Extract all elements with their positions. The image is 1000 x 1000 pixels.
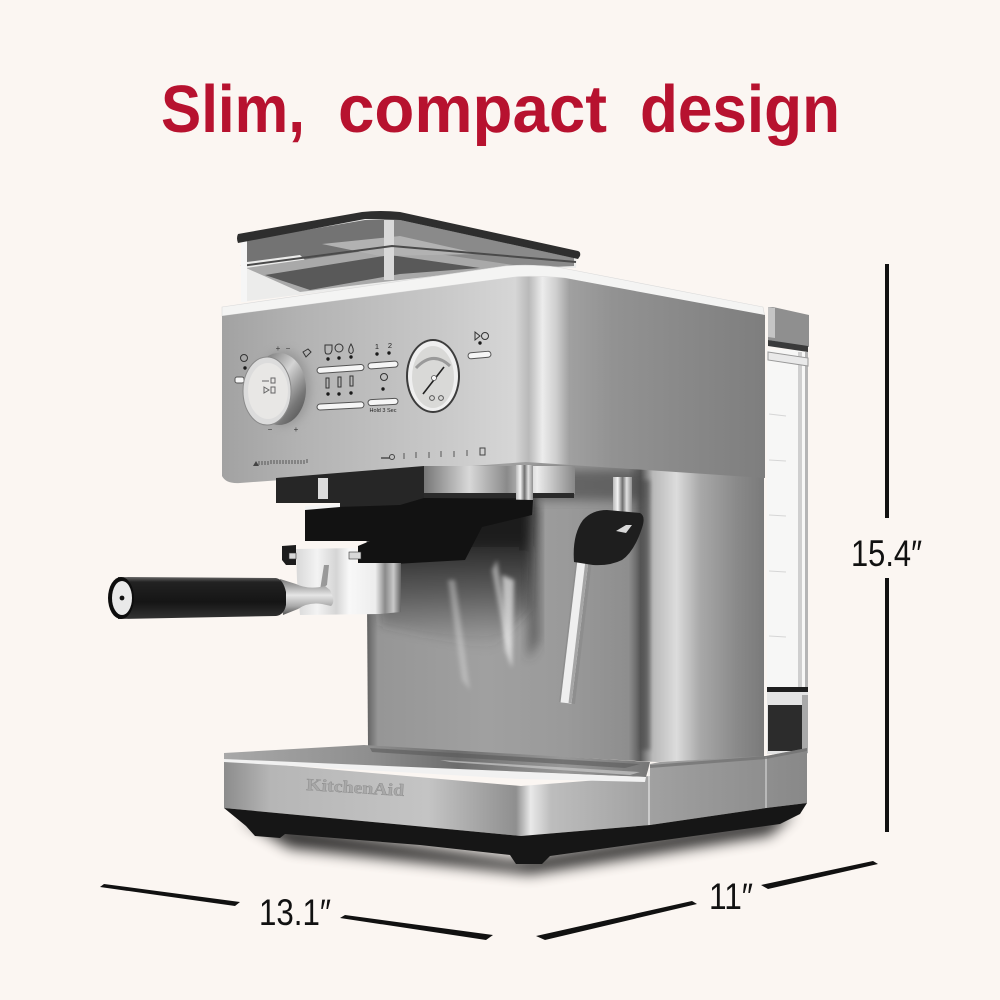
title: compact	[338, 72, 607, 147]
steam wand grip	[574, 510, 644, 565]
shadow beneath the group head	[366, 498, 542, 640]
espresso machine	[108, 211, 809, 874]
bottom indicators	[259, 450, 467, 465]
control panel: +	[294, 425, 299, 434]
plus minus labels: +	[276, 344, 281, 353]
portafilter handle	[108, 577, 333, 619]
height dimension: 15.4″	[851, 533, 922, 574]
control dial	[243, 351, 310, 425]
drip tray base	[224, 745, 807, 836]
button bars	[235, 351, 491, 410]
portafilter basket	[289, 548, 401, 615]
base feet	[224, 803, 807, 864]
depth dimension: 11″	[709, 876, 753, 917]
control panel: Hold 3 Sec	[370, 408, 397, 414]
height dimension	[851, 264, 922, 832]
control panel: −	[268, 425, 273, 434]
panel icons	[240, 332, 488, 388]
brand logo: KitchenAid	[306, 775, 405, 800]
floor shadow	[240, 812, 795, 874]
number labels: 1	[375, 342, 379, 351]
width dimension: 13.1″	[259, 892, 331, 933]
control panel: 2	[388, 341, 392, 350]
title: design	[640, 72, 840, 147]
hopper lid	[237, 211, 580, 259]
title	[161, 72, 840, 147]
control panel: −	[286, 344, 291, 353]
control panel	[235, 332, 491, 466]
water tank	[767, 307, 809, 754]
dark bracket	[282, 498, 533, 566]
indicator dots	[243, 341, 482, 396]
depth dimension	[536, 861, 878, 940]
steam wand	[566, 477, 644, 703]
head unit	[222, 265, 765, 483]
width dimension	[100, 884, 493, 940]
machine body	[366, 455, 764, 762]
title: Slim,	[161, 72, 305, 147]
pressure gauge	[406, 339, 460, 413]
group head collar	[276, 465, 575, 508]
bean hopper	[241, 216, 577, 302]
portafilter	[108, 548, 401, 619]
